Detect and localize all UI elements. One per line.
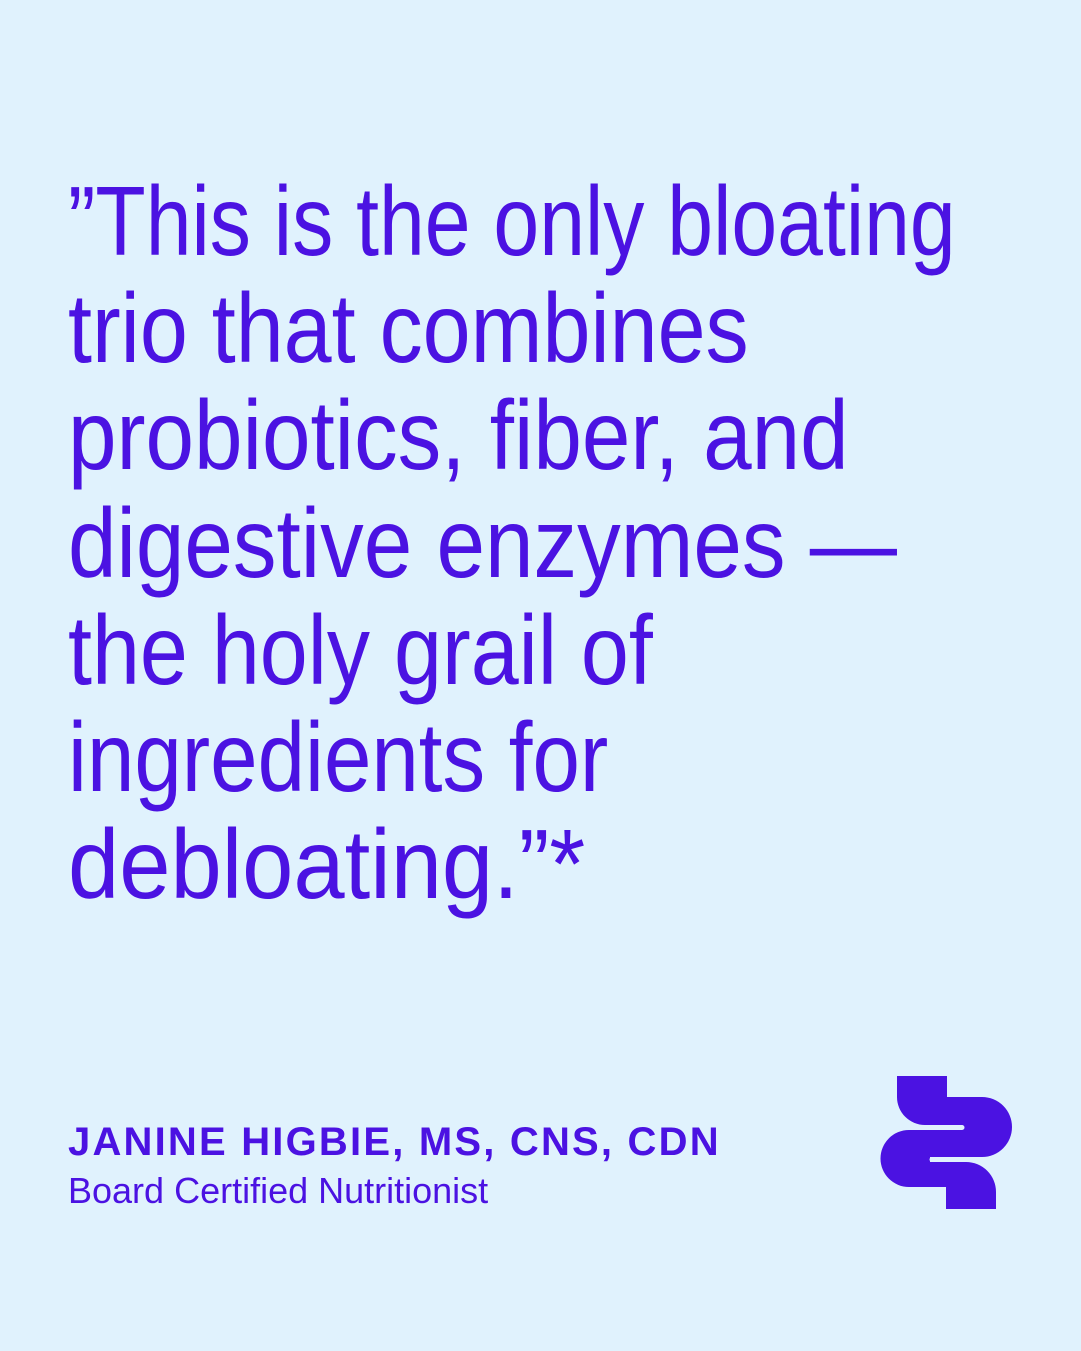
- quote text: trio that combines: [68, 273, 749, 383]
- author title: Board Certified Nutritionist: [68, 1170, 488, 1211]
- quote text: the holy grail of: [68, 595, 653, 705]
- quote text: debloating.”*: [68, 809, 585, 919]
- quote text: digestive enzymes —: [68, 488, 897, 598]
- quote text: [68, 166, 956, 919]
- author name: JANINE HIGBIE, MS, CNS, CDN: [68, 1120, 721, 1164]
- quote text: ”This is the only bloating: [68, 166, 956, 276]
- quote text: probiotics, fiber, and: [68, 380, 849, 490]
- quote text: ingredients for: [68, 702, 608, 812]
